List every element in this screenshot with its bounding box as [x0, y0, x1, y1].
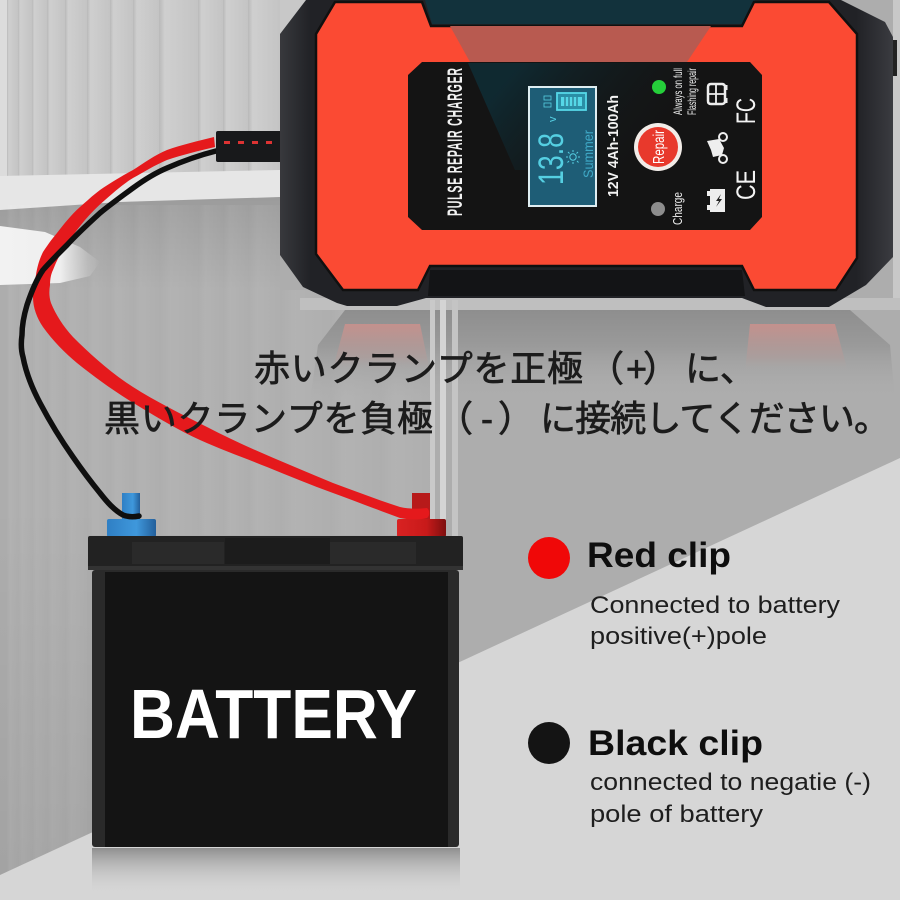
red front panel: [316, 2, 857, 290]
charger black housing: [280, 0, 893, 307]
darker band under floor: [0, 197, 280, 290]
repair button: [634, 123, 682, 171]
white floor glare: [0, 226, 100, 285]
repair button: Repair: [651, 130, 668, 164]
instruction heading: （: [588, 348, 624, 389]
LCD battery icon: [544, 93, 586, 110]
battery lid: [88, 536, 463, 570]
icon: battery: [707, 189, 725, 212]
panel title: PULSE REPAIR CHARGER: [443, 68, 467, 216]
red clip heading: Red clip: [587, 536, 731, 575]
LCD season: Summer: [580, 130, 596, 178]
black clip description: connected to negatie (-): [590, 769, 871, 796]
LCD volt unit: v: [547, 116, 559, 122]
legend: red clip: [528, 536, 840, 650]
floor diagonal: [0, 458, 900, 900]
instruction heading: 赤いクランプを正極: [254, 348, 583, 389]
instruction heading: ）: [643, 348, 679, 389]
LCD sun icon: [566, 150, 580, 164]
instruction heading: に、: [685, 348, 756, 389]
bottom recess: [428, 270, 745, 296]
red cable: [33, 137, 429, 520]
charger: [216, 0, 897, 307]
green LED: [652, 80, 666, 94]
charger reflection: [310, 310, 895, 400]
instruction heading: （: [437, 398, 473, 439]
red clip description: positive(+)pole: [590, 623, 767, 650]
rating text: 12V 4Ah-100Ah: [605, 95, 622, 197]
charge label: Charge: [671, 192, 685, 225]
battery: [88, 536, 463, 847]
blue negative terminal: [107, 493, 156, 537]
charger cable connector: [216, 131, 282, 162]
red positive terminal: [397, 493, 446, 537]
icon: car: [708, 84, 728, 104]
flashing repair label: Flashing repair: [685, 68, 699, 115]
instruction heading: [104, 348, 890, 439]
LCD display: [529, 87, 596, 206]
icon: motorcycle: [707, 133, 727, 163]
black clip heading: Black clip: [588, 724, 763, 763]
battery label: BATTERY: [130, 675, 417, 753]
black clip description: [590, 769, 871, 828]
instruction heading: -: [481, 398, 493, 439]
lower wall stripes: [7, 205, 430, 875]
instruction heading: に接続してください。: [540, 398, 890, 439]
grey LED: [651, 202, 665, 216]
black dot: [528, 722, 570, 764]
CE mark: CE: [731, 170, 761, 200]
rear connector: [893, 40, 897, 76]
red dot: [528, 537, 570, 579]
instruction heading: +: [626, 348, 647, 389]
wall shade: [0, 500, 92, 880]
panel reflection: [450, 26, 711, 62]
legend: black clip: [528, 722, 871, 828]
black cable: [21, 151, 216, 517]
instruction heading: ）: [498, 398, 534, 439]
LCD voltage: 13.8: [532, 133, 571, 185]
pale strip under charger: [300, 298, 900, 310]
pale window stripes: [430, 300, 458, 536]
red clip description: Connected to battery: [590, 592, 840, 619]
instruction heading: 黒いクランプを負極: [104, 398, 433, 439]
black clip description: pole of battery: [590, 801, 763, 828]
upper wall stripes: [0, 0, 310, 176]
always on full label: Always on full: [671, 68, 685, 115]
top recess: [425, 0, 755, 24]
red clip description: [590, 592, 840, 650]
battery case: [92, 570, 459, 847]
FC mark: FC: [731, 98, 761, 124]
battery floor reflection: [92, 848, 460, 894]
control panel: [408, 62, 762, 230]
white floor band: [0, 170, 280, 210]
